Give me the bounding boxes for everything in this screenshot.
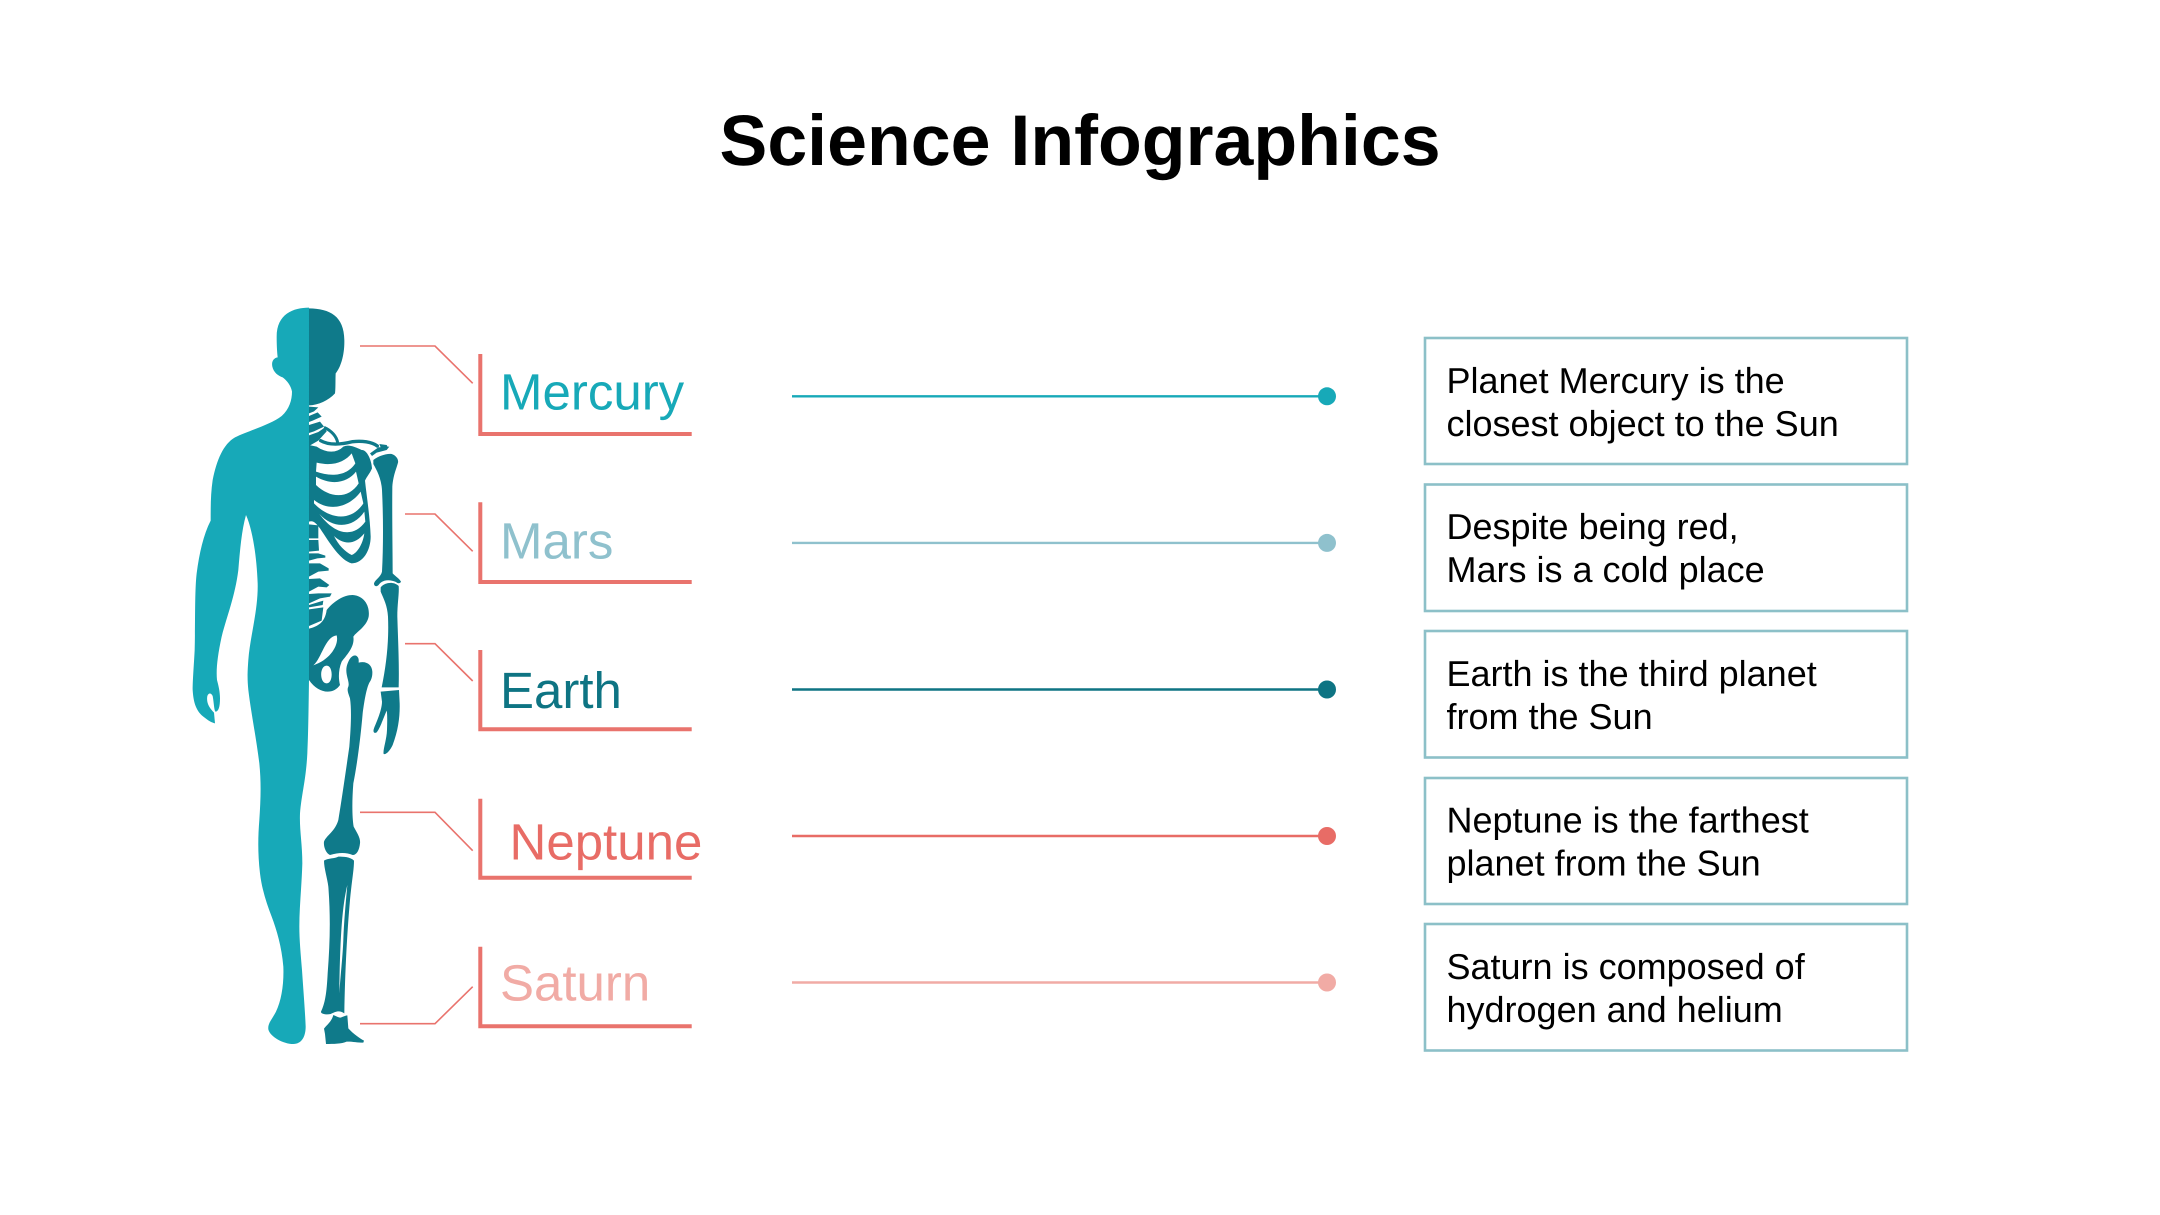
description box: Mars: [1425, 484, 1907, 611]
description box: Mars: Mars is a cold place: [1446, 549, 1765, 590]
description box: Neptune: planet from the Sun: [1446, 842, 1761, 884]
connector: Saturn: [360, 987, 473, 1024]
lumbar spine: [309, 524, 332, 626]
rib cage: [309, 445, 372, 563]
label: Neptune: Neptune: [510, 814, 702, 870]
pelvis: [309, 595, 369, 692]
collar bones: [324, 427, 338, 443]
human figure: half body, half skeleton: [193, 308, 401, 1044]
timeline: Saturn: [792, 974, 1336, 992]
description box: Earth: Earth is the third planet: [1446, 653, 1817, 694]
connector: Mercury: [360, 346, 473, 383]
hand bones: [373, 690, 400, 754]
neck vertebrae: [309, 407, 327, 446]
skeleton head: [309, 308, 344, 405]
description box: Saturn: [1425, 924, 1907, 1050]
timeline: Mars: [792, 534, 1336, 552]
description box: Mercury: [1425, 338, 1907, 464]
foot bones: [324, 1015, 364, 1044]
connector: Earth: [405, 644, 473, 681]
bracket: Mars: [480, 502, 692, 582]
forearm bones: [381, 583, 399, 687]
bracket: Neptune: [480, 799, 692, 878]
description box: Mercury: Planet Mercury is the: [1446, 360, 1785, 401]
label: Mercury: Mercury: [500, 364, 685, 420]
humerus: [373, 454, 401, 586]
description box: Earth: [1425, 631, 1907, 758]
description box: Earth: from the Sun: [1446, 696, 1653, 737]
timeline: Mercury: [792, 387, 1336, 405]
description box: Saturn: Saturn is composed of: [1446, 946, 1806, 987]
label: Earth: Earth: [500, 662, 622, 719]
description box: Saturn: hydrogen and helium: [1446, 989, 1783, 1030]
description box: Mars: Despite being red,: [1446, 506, 1739, 547]
bracket: Saturn: [480, 947, 692, 1026]
bracket: Earth: [480, 650, 692, 729]
description box: Neptune: Neptune is the farthest: [1446, 800, 1809, 840]
bracket: Mercury: [480, 354, 692, 434]
femur: [324, 656, 372, 855]
description box: Mercury: closest object to the Sun: [1446, 403, 1839, 444]
timeline: Neptune: [792, 827, 1336, 845]
label: Saturn: Saturn: [500, 955, 650, 1012]
body silhouette: [193, 308, 309, 1044]
skeleton bones: [309, 407, 401, 1044]
tibia and fibula: [321, 857, 354, 1014]
description box: Neptune: [1425, 778, 1907, 904]
label: Mars: Mars: [500, 512, 613, 570]
title: Science Infographics: [720, 101, 1441, 181]
connector: Mars: [405, 514, 473, 551]
timeline: Earth: [792, 680, 1336, 698]
connector: Neptune: [360, 812, 473, 851]
